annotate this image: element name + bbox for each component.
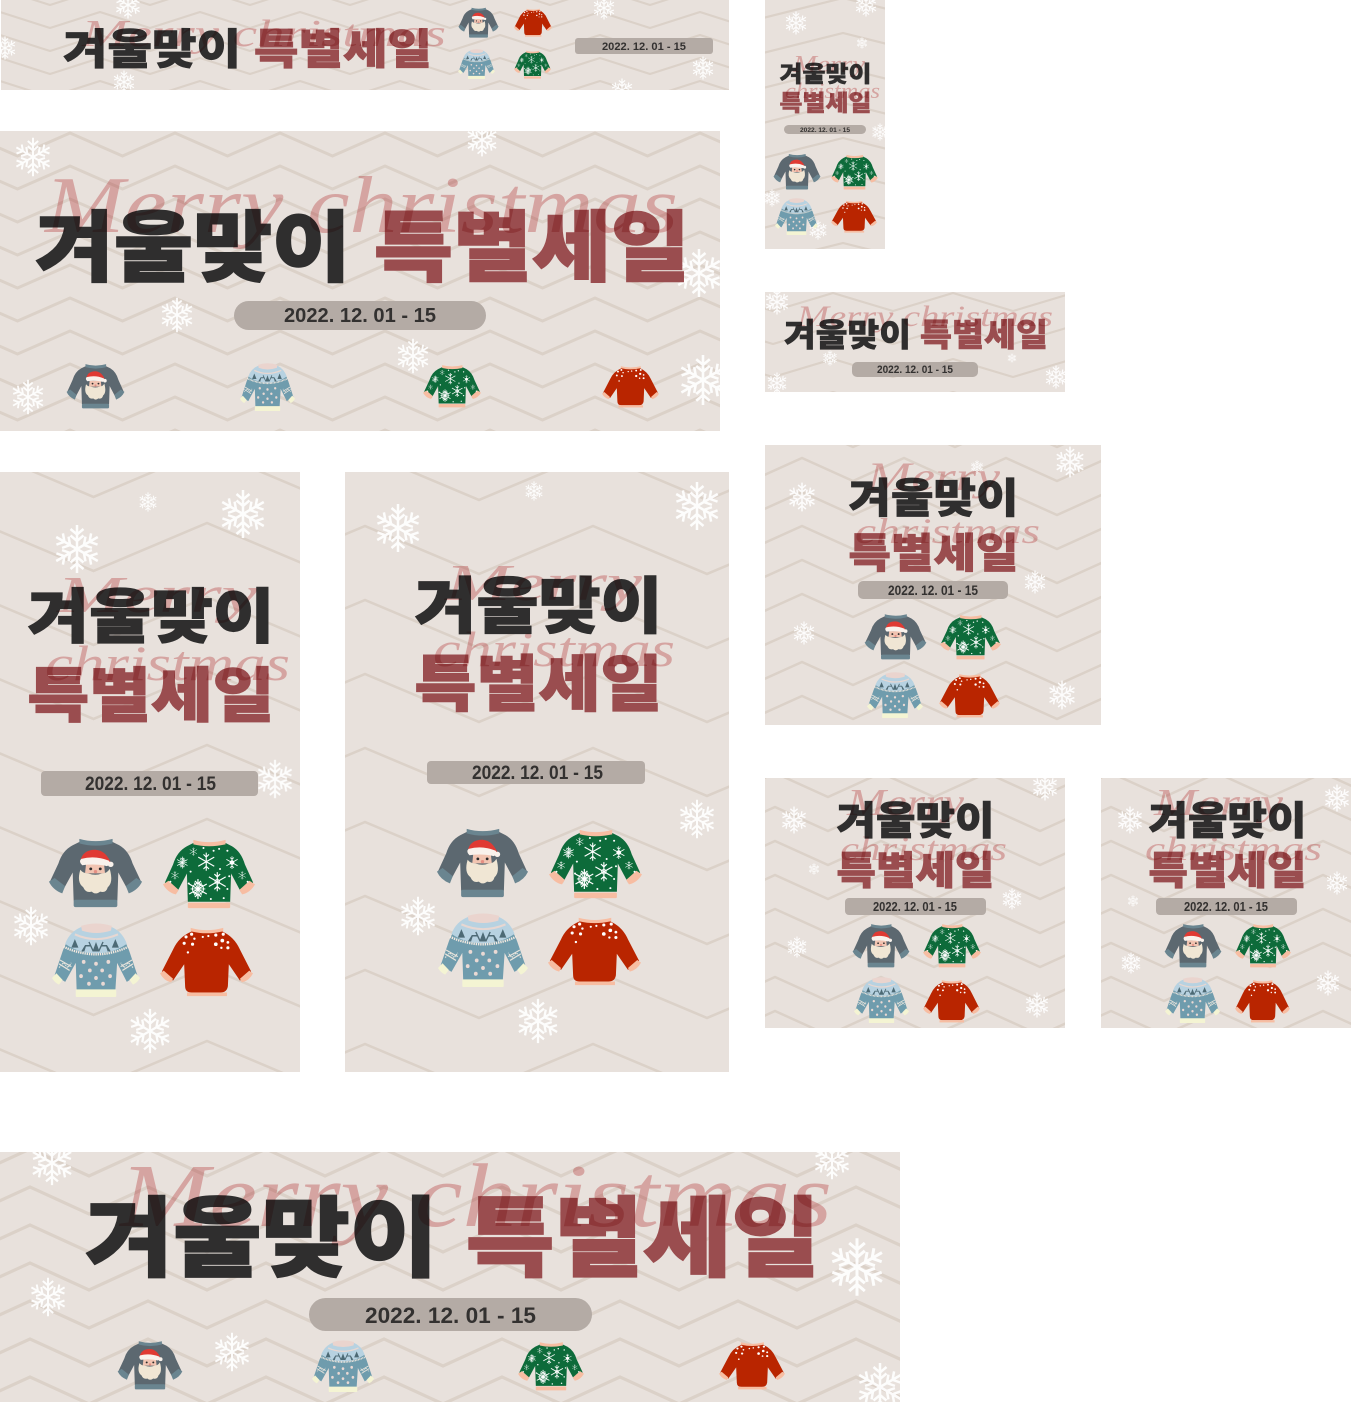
icon: red sweater (719, 1342, 785, 1389)
icon: red sweater (923, 980, 980, 1022)
icon: blue sweater (312, 1340, 374, 1392)
date pill: 2022. 12. 01 - 15 (85, 774, 216, 795)
date pill: 2022. 12. 01 - 15 (873, 900, 957, 914)
script: Merry christmas: Merry christmas (81, 13, 446, 55)
heading: 겨울맞이 (85, 1191, 438, 1288)
icon: red sweater (602, 366, 659, 407)
icon: blue sweater (867, 672, 923, 718)
heading: 특별세일 (848, 530, 1018, 576)
heading: 겨울맞이 (836, 800, 994, 844)
icon: santa sweater (67, 364, 124, 408)
snowflakes (29, 1141, 904, 1402)
snowflakes (781, 774, 1058, 1017)
snowflakes (788, 447, 1085, 709)
icon: red sweater (548, 918, 641, 985)
heading: 특별세일 (1148, 850, 1306, 894)
panel: banner 720x300 (0, 124, 728, 431)
snowflakes (12, 490, 294, 1053)
date pill (427, 761, 645, 784)
panel: banner 900x250 (0, 1141, 904, 1402)
date pill: 2022. 12. 01 - 15 (888, 583, 978, 598)
icon: green sweater (831, 155, 878, 190)
icon: green sweater (1235, 924, 1291, 967)
heading (63, 28, 429, 69)
panel: banner 250x250 (1101, 778, 1351, 1028)
snowflakes (1117, 785, 1350, 995)
script: Merry christmas: Merry christmas (44, 162, 678, 250)
heading: 겨울맞이 (1148, 800, 1306, 844)
date pill: 2022. 12. 01 - 15 (365, 1303, 536, 1328)
snowflakes (11, 124, 728, 414)
icon: red sweater (160, 928, 253, 996)
script: christmas: christmas (785, 78, 880, 103)
date pill (575, 38, 713, 54)
heading: 특별세일 (466, 1191, 820, 1288)
icon: green sweater (923, 924, 981, 967)
panel: banner 728x90 (1, 0, 729, 90)
panel: banner 120x249 (763, 0, 889, 249)
icon: green sweater (940, 615, 1001, 659)
panel: banner 384x600 (345, 472, 729, 1072)
script: christmas: christmas (855, 511, 1040, 551)
script: Merry: Merry (866, 454, 1000, 499)
heading (85, 1191, 820, 1288)
heading (28, 585, 274, 730)
date pill: 2022. 12. 01 - 15 (284, 305, 436, 327)
heading: 특별세일 (254, 26, 432, 73)
icon: green sweater (514, 51, 551, 79)
heading: 특별세일 (920, 317, 1048, 353)
heading: 겨울맞이 (848, 475, 1018, 521)
icon: red sweater (831, 201, 877, 233)
date pill (1156, 898, 1297, 915)
panel: banner 300x600 (0, 472, 300, 1072)
heading: 특별세일 (374, 206, 690, 292)
script: christmas: christmas (433, 621, 675, 677)
icon: green sweater (518, 1342, 584, 1390)
date pill: 2022. 12. 01 - 15 (1184, 900, 1268, 914)
icon: red sweater (514, 9, 552, 37)
heading: 겨울맞이 (784, 317, 911, 353)
date pill (309, 1298, 592, 1331)
heading (836, 800, 994, 894)
snowflakes (374, 481, 721, 1043)
script: Merry: Merry (443, 555, 643, 612)
date pill (858, 581, 1008, 599)
icon: green sweater (423, 365, 481, 407)
date pill (784, 125, 866, 134)
panel: banner 300x250 (765, 774, 1065, 1028)
heading (36, 208, 684, 284)
heading: 겨울맞이 (35, 206, 351, 292)
heading: 겨울맞이 (414, 572, 662, 640)
date pill: 2022. 12. 01 - 15 (877, 364, 953, 376)
icon: blue sweater (1165, 977, 1220, 1023)
script: Merry: Merry (846, 782, 964, 824)
icon: santa sweater (1165, 924, 1221, 967)
script: christmas: christmas (840, 831, 1007, 868)
icon: blue sweater (52, 923, 140, 997)
snowflakes (765, 290, 1068, 394)
snowflakes (763, 0, 889, 240)
icon: santa sweater (437, 829, 528, 897)
script: Merry: Merry (792, 52, 865, 78)
date pill (852, 362, 978, 377)
script: Merry christmas: Merry christmas (796, 300, 1053, 333)
icon: santa sweater (458, 8, 499, 38)
heading (780, 62, 872, 116)
icon: santa sweater (773, 154, 821, 190)
icon: santa sweater (49, 839, 142, 907)
date pill: 2022. 12. 01 - 15 (800, 127, 850, 134)
icon: blue sweater (854, 977, 909, 1023)
panel: banner 336x280 (765, 445, 1101, 725)
date pill (41, 771, 258, 796)
icon: santa sweater (853, 924, 909, 967)
date pill: 2022. 12. 01 - 15 (472, 763, 603, 784)
icon: green sweater (549, 830, 642, 898)
script: christmas: christmas (1145, 831, 1322, 868)
heading: 특별세일 (836, 850, 994, 894)
date pill (234, 301, 486, 330)
heading: 겨울맞이 (63, 26, 241, 73)
heading: 특별세일 (414, 650, 662, 718)
icon: blue sweater (240, 363, 295, 411)
heading: 겨울맞이 (28, 585, 274, 651)
snowflakes (1, 0, 714, 90)
icon: red sweater (939, 674, 1000, 717)
icon: santa sweater (118, 1341, 182, 1389)
script: Merry christmas: Merry christmas (118, 1147, 832, 1246)
script: Merry: Merry (1153, 782, 1283, 824)
heading (1148, 800, 1306, 894)
icon: green sweater (163, 840, 255, 908)
date pill (845, 898, 986, 915)
heading: 겨울맞이 (780, 62, 872, 87)
panel: banner 300x100 (765, 290, 1068, 394)
script: Merry: Merry (55, 567, 258, 624)
icon: blue sweater (458, 49, 495, 79)
heading: 특별세일 (780, 91, 872, 116)
icon: blue sweater (438, 913, 528, 987)
icon: blue sweater (775, 198, 818, 235)
heading (784, 318, 1046, 350)
icon: santa sweater (865, 614, 926, 659)
heading: 특별세일 (28, 664, 274, 730)
date pill: 2022. 12. 01 - 15 (602, 41, 686, 53)
heading (848, 475, 1018, 576)
icon: red sweater (1235, 980, 1290, 1022)
heading (414, 572, 662, 718)
script: christmas: christmas (45, 635, 290, 691)
